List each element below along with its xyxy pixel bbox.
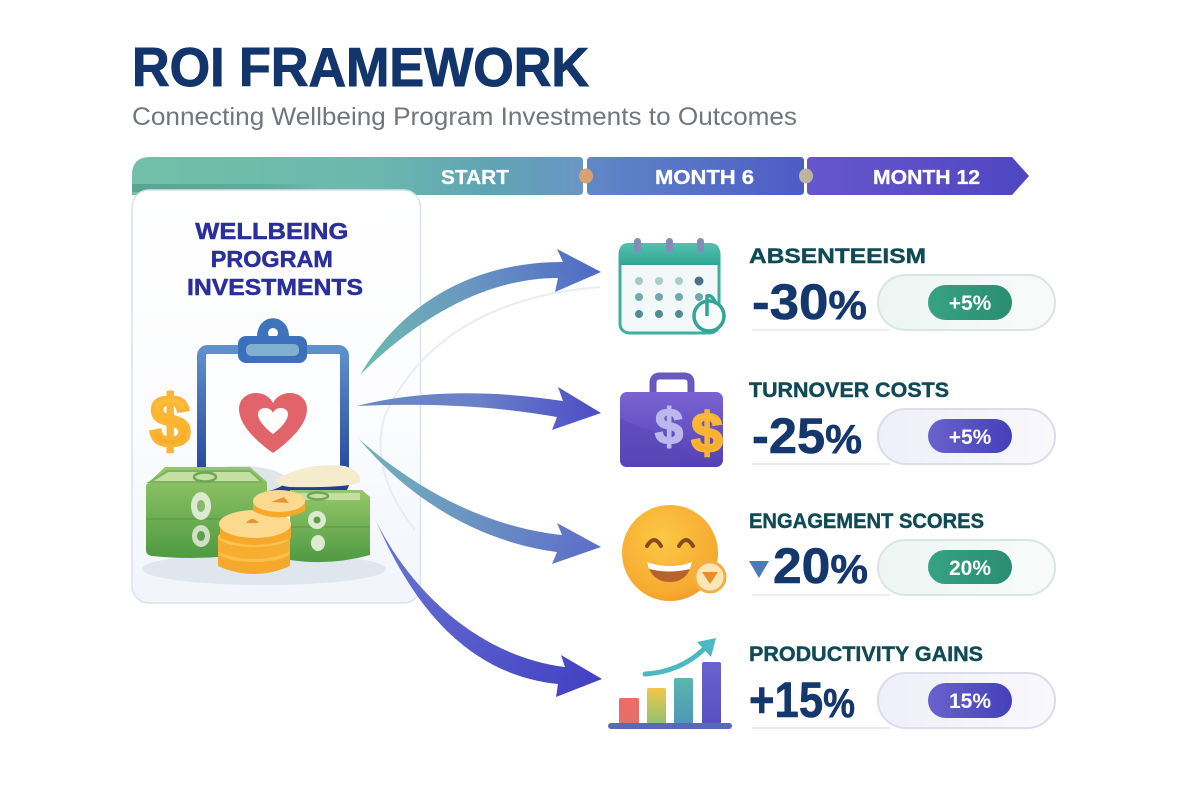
pill badge [928, 683, 1012, 718]
title: ROI FRAMEWORK [132, 36, 589, 98]
metric value: -30% [752, 274, 867, 330]
timeline segment: month 12: MONTH 12 [873, 167, 980, 189]
pill badge: 15% [949, 690, 991, 713]
timeline segment: start [132, 157, 583, 195]
pill track [878, 673, 1055, 728]
panel: wellbeing program investments [132, 190, 420, 603]
icon: calendar [619, 238, 724, 333]
row: engagement scores [622, 505, 1055, 601]
pill badge [928, 419, 1012, 453]
subtitle: Connecting Wellbeing Program Investments to Outcomes [132, 103, 797, 131]
metric value: +15% [749, 672, 855, 728]
decorative faint arc [380, 287, 600, 530]
panel heading: WELLBEING [195, 218, 348, 244]
icon: briefcase [620, 376, 723, 467]
row: absenteeism [619, 238, 1055, 333]
timeline segment: month 6 [587, 157, 804, 195]
pill badge: 20% [949, 557, 991, 580]
pill badge [928, 550, 1012, 584]
milestone marker: month 12 [799, 168, 813, 184]
pill badge: +5% [949, 292, 992, 315]
panel heading: INVESTMENTS [187, 274, 363, 300]
arrow: investments to absenteeism [360, 249, 601, 375]
timeline segment: start: START [441, 167, 509, 189]
icon: briefcase: $ [655, 399, 683, 455]
pill badge: +5% [949, 426, 992, 449]
pill badge [928, 285, 1012, 320]
arrow: investments to productivity gains [376, 521, 602, 697]
pill track [878, 540, 1055, 595]
icon: smiley face [622, 505, 725, 601]
icon: clipboard with heart [202, 318, 344, 490]
underline [752, 463, 890, 465]
timeline segment: month 6: MONTH 6 [655, 167, 754, 189]
metric label: ENGAGEMENT SCORES [749, 510, 984, 533]
timeline bar [132, 157, 1029, 195]
underline [752, 329, 890, 331]
metric label: ABSENTEEISM [749, 245, 926, 268]
pill track [878, 275, 1055, 330]
timeline segment: month 12 [807, 157, 1029, 195]
milestone marker: month 6 [579, 168, 593, 184]
icon: dollar sign: $ [150, 382, 190, 462]
panel heading: PROGRAM [211, 246, 333, 272]
icon: rising bar chart [608, 638, 732, 729]
metric value: -25% [752, 408, 862, 464]
icon: briefcase: $ [691, 401, 723, 464]
arrow: investments to engagement scores [359, 439, 601, 564]
metric value: 20% [773, 538, 868, 594]
pill track [878, 409, 1055, 464]
icon: down triangle [749, 561, 769, 578]
row: turnover costs [620, 376, 1055, 467]
icon: money and coins [142, 465, 386, 585]
metric label: PRODUCTIVITY GAINS [749, 643, 983, 666]
row: productivity gains [608, 638, 1055, 729]
underline [752, 594, 890, 596]
arrow: investments to turnover costs [357, 387, 601, 430]
metric label: TURNOVER COSTS [749, 379, 949, 402]
underline [752, 727, 890, 729]
